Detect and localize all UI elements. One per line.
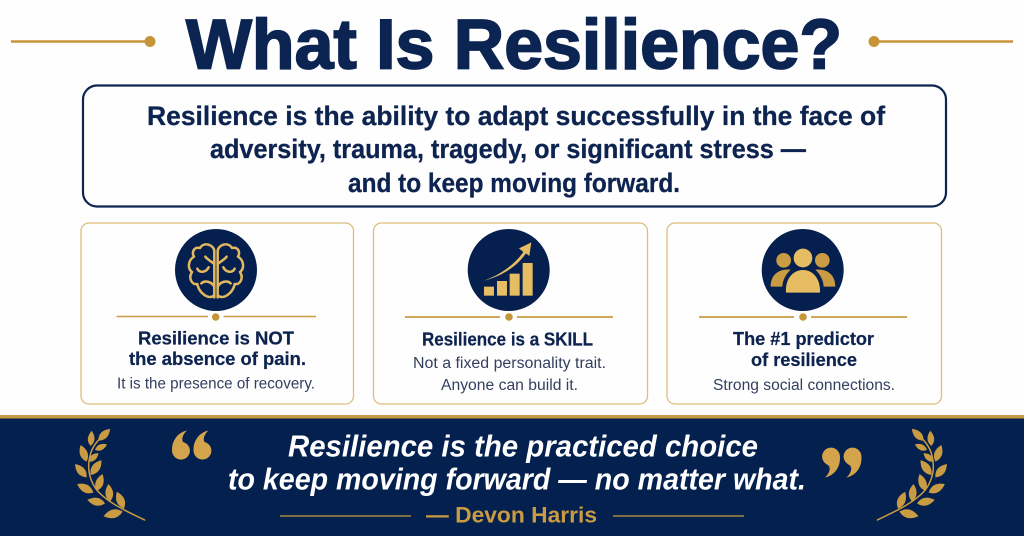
panel: number one predictor — [667, 223, 942, 404]
left title ornament — [11, 36, 156, 47]
card text: Anyone can build it. — [441, 377, 578, 394]
quote text: to keep moving forward — no matter what. — [228, 462, 806, 496]
divider — [116, 313, 316, 321]
card text — [413, 355, 606, 394]
card heading: Resilience is a SKILL — [422, 328, 593, 350]
card heading: Resilience is NOT — [138, 328, 295, 348]
card heading: of resilience — [751, 349, 857, 370]
attribution: — Devon Harris — [426, 502, 597, 528]
card heading: The #1 predictor — [733, 328, 874, 349]
title: What Is Resilience? — [186, 4, 842, 84]
right title ornament — [868, 36, 1013, 47]
icon: left laurel — [72, 426, 145, 520]
panel: not the absence of pain — [81, 223, 354, 404]
card text: Strong social connections. — [713, 377, 895, 394]
card heading — [733, 328, 874, 370]
definition panel: Resilience is the ability to adapt successfully in the face of — [147, 101, 886, 131]
icon: group of people — [762, 229, 844, 311]
quote banner — [0, 415, 1024, 536]
definition panel — [83, 86, 946, 206]
quote text: Resilience is the practiced choice — [288, 430, 758, 464]
icon: brain — [175, 229, 257, 311]
card text: Not a fixed personality trait. — [413, 355, 606, 372]
icon: rising bar chart — [468, 229, 550, 311]
card text: It is the presence of recovery. — [117, 376, 315, 392]
card heading — [129, 328, 306, 369]
card heading: the absence of pain. — [129, 348, 306, 369]
quote text — [228, 430, 806, 496]
definition panel: adversity, trauma, tragedy, or significant stress — — [210, 134, 806, 164]
icon: opening quote mark — [172, 430, 211, 460]
panel: resilience is a skill — [374, 223, 648, 404]
definition panel: and to keep moving forward. — [348, 168, 680, 198]
icon: right laurel — [877, 426, 950, 520]
divider — [405, 313, 613, 321]
divider — [699, 313, 907, 321]
icon: closing quote mark — [822, 448, 861, 478]
